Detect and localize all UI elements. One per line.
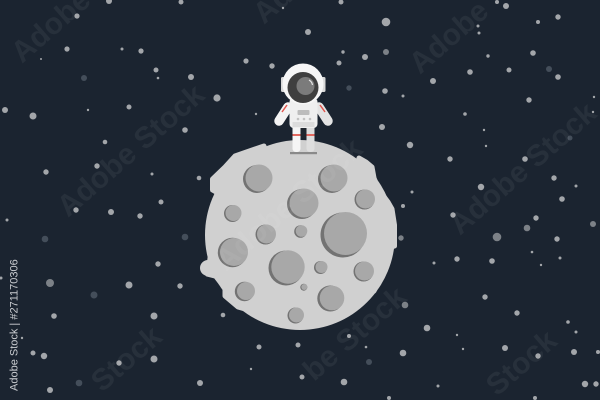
starfield: mid stars (46, 49, 596, 308)
visor glint (309, 80, 312, 85)
watermarks: Adobe Stock: Adobe Stock (209, 132, 369, 277)
left leg (292, 124, 300, 152)
watermarks: Adobe Stock: Adobe Stock (51, 78, 211, 223)
gap between legs (300, 126, 307, 138)
starfield: dim stars (42, 66, 572, 386)
watermarks: Adobe Stock: Adobe Stock (443, 96, 600, 241)
helmet visor (288, 72, 318, 103)
left arm (279, 107, 288, 121)
arm stripes (282, 105, 325, 112)
ground shadow (290, 152, 317, 154)
torso (290, 98, 318, 128)
right arm (319, 107, 328, 121)
leg stripes (292, 134, 314, 136)
moon (200, 140, 395, 330)
moon surface with bumps (200, 140, 395, 330)
watermarks: Adobe Stock: Stock (480, 324, 563, 400)
craters (218, 165, 374, 324)
helmet (282, 64, 324, 104)
astronaut (279, 64, 328, 154)
watermarks: Adobe Stock: Stock (85, 320, 168, 398)
watermarks: Adobe Stock: be Stock (297, 280, 413, 387)
right leg (306, 124, 314, 152)
chest panel (292, 110, 314, 127)
stock id label: Adobe Stock | #271170306 (8, 259, 20, 391)
visor reflection (296, 77, 314, 95)
helmet ear pieces (281, 77, 326, 92)
